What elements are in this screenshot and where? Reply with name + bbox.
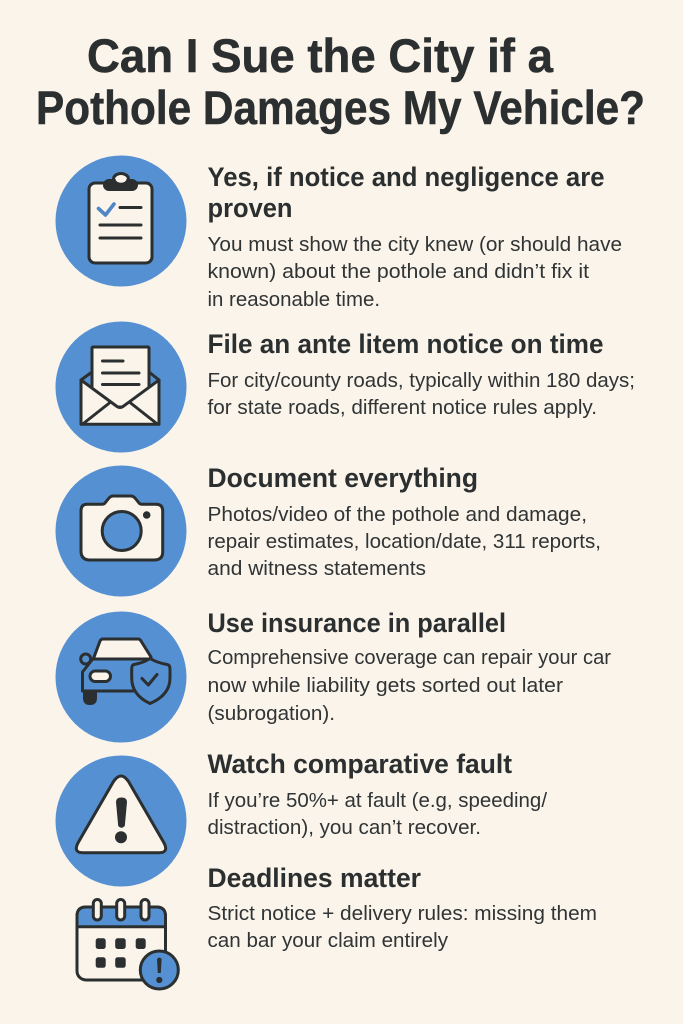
- text block: for state roads, different notice rules apply.: [208, 396, 597, 419]
- text block: [208, 646, 611, 725]
- title: [36, 29, 645, 134]
- text block: repair estimates, location/date, 311 reports,: [208, 530, 601, 553]
- text block: known) about the pothole and didn’t fix it: [208, 260, 589, 283]
- panel: ante litem notice: [56, 322, 635, 452]
- heading: Yes, if notice and negligence are: [208, 162, 604, 192]
- text block: (subrogation).: [208, 702, 335, 725]
- icon: clipboard with checklist: [56, 156, 186, 286]
- heading: Use insurance in parallel: [208, 608, 506, 638]
- panel: deadlines: [77, 863, 597, 989]
- heading: Document everything: [208, 463, 478, 493]
- text block: [208, 503, 601, 580]
- text block: [208, 789, 547, 839]
- text block: can bar your claim entirely: [208, 929, 449, 952]
- text block: Strict notice + delivery rules: missing them: [208, 902, 597, 925]
- icon: calendar with alert: [77, 900, 178, 989]
- text block: now while liability gets sorted out later: [208, 674, 563, 697]
- icon: car with shield: [56, 612, 186, 742]
- text block: [208, 233, 622, 311]
- title: Can I Sue the City if a: [87, 29, 554, 82]
- icon: camera: [56, 466, 186, 596]
- icon: warning triangle: [56, 756, 186, 886]
- panel: comparative fault: [56, 749, 547, 886]
- heading: proven: [208, 193, 292, 223]
- text block: and witness statements: [208, 557, 426, 580]
- text block: You must show the city knew (or should have: [208, 233, 622, 256]
- heading: [208, 162, 604, 223]
- text block: For city/county roads, typically within 180 days;: [208, 369, 635, 392]
- text block: If you’re 50%+ at fault (e.g, speeding/: [208, 789, 547, 812]
- text block: distraction), you can’t recover.: [208, 816, 481, 839]
- text block: [208, 902, 597, 952]
- icon: envelope with letter: [56, 322, 186, 452]
- panel: insurance: [56, 608, 611, 742]
- text block: Comprehensive coverage can repair your car: [208, 646, 611, 669]
- heading: Watch comparative fault: [208, 749, 512, 779]
- heading: Deadlines matter: [208, 863, 421, 893]
- text block: [208, 369, 635, 419]
- text block: Photos/video of the pothole and damage,: [208, 503, 587, 526]
- heading: File an ante litem notice on time: [208, 329, 604, 359]
- panel: document everything: [56, 463, 601, 596]
- panel: proof of notice and negligence: [56, 156, 622, 311]
- text block: in reasonable time.: [208, 288, 380, 311]
